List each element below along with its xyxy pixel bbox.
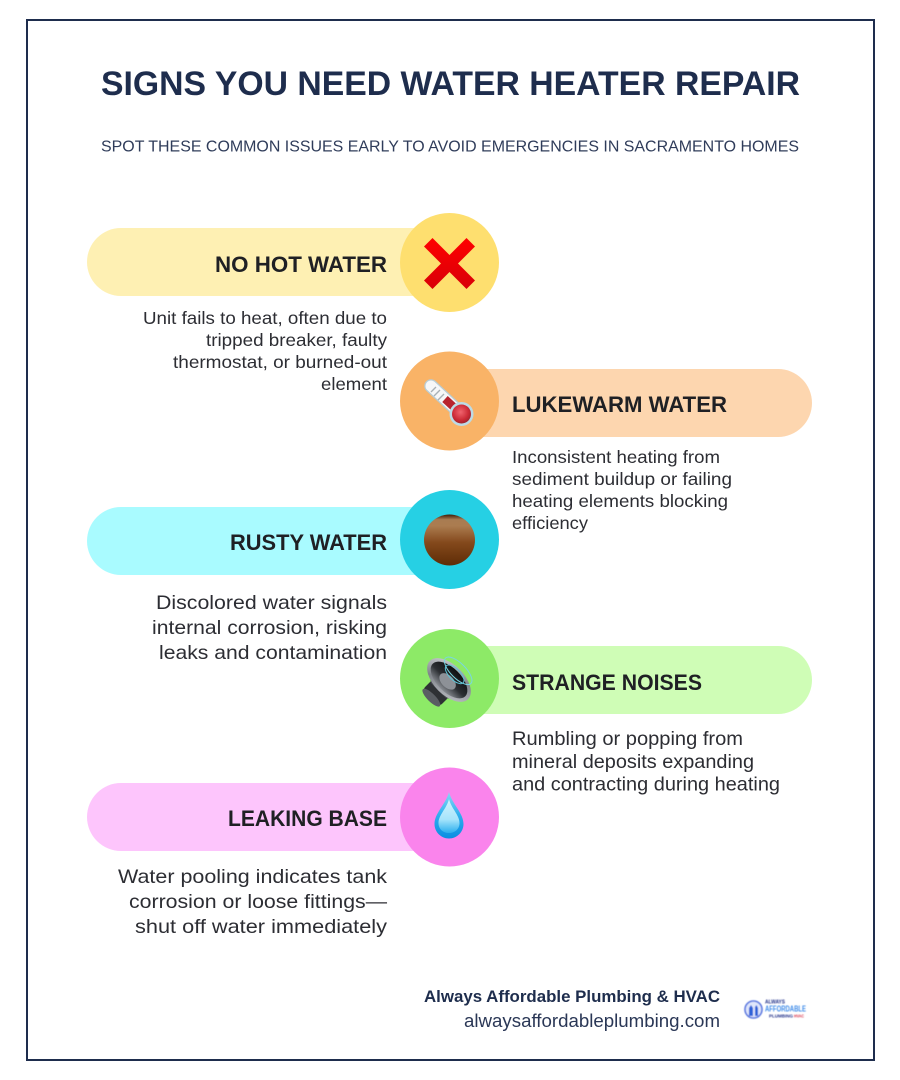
pill: no hot water <box>87 228 457 296</box>
description: lukewarm water: efficiency <box>512 513 588 533</box>
subtitle: SPOT THESE COMMON ISSUES EARLY TO AVOID EMERGENCIES IN SACRAMENTO HOMES <box>101 138 799 156</box>
icon: speaker <box>409 646 483 720</box>
icon: thermometer <box>431 386 474 426</box>
title: SIGNS YOU NEED WATER HEATER REPAIR <box>101 65 800 103</box>
logo <box>745 1000 806 1018</box>
heading: leaking base: LEAKING BASE <box>228 806 387 831</box>
icon circle: leaking base <box>400 768 499 866</box>
panel: lukewarm water <box>400 352 812 533</box>
description: strange noises: Rumbling or popping from <box>512 728 743 750</box>
panel: rusty water <box>87 490 499 664</box>
logo: PLUMBING <box>769 1014 793 1018</box>
description: leaking base <box>118 866 388 938</box>
panel: leaking base <box>87 768 499 938</box>
description: lukewarm water: heating elements blocking <box>512 491 728 511</box>
description: no hot water: tripped breaker, faulty <box>206 330 387 350</box>
description: rusty water <box>152 592 387 664</box>
description: lukewarm water: Inconsistent heating from <box>512 447 720 467</box>
heading: lukewarm water: LUKEWARM WATER <box>512 392 727 417</box>
heading: no hot water: NO HOT WATER <box>215 252 387 277</box>
logo: ALWAYS <box>765 1000 786 1006</box>
icon: water drop <box>434 792 464 838</box>
icon circle: lukewarm water <box>400 352 499 450</box>
description: no hot water: thermostat, or burned-out <box>173 352 387 372</box>
description: strange noises: and contracting during heating <box>512 774 780 796</box>
footer: company name: Always Affordable Plumbing & HVAC <box>424 988 720 1006</box>
icon: brown circle <box>424 514 475 566</box>
description: rusty water: internal corrosion, risking <box>152 617 387 639</box>
heading: rusty water: RUSTY WATER <box>230 530 387 555</box>
icon circle: no hot water <box>400 213 499 312</box>
icon circle: strange noises <box>400 629 499 728</box>
description: lukewarm water: sediment buildup or failing <box>512 469 732 489</box>
description: no hot water: Unit fails to heat, often due to <box>143 308 387 328</box>
icon circle: rusty water <box>400 490 499 589</box>
pill: leaking base <box>87 783 457 851</box>
description: strange noises: mineral deposits expanding <box>512 751 754 773</box>
pill: rusty water <box>87 507 457 575</box>
icon: red cross <box>424 238 475 289</box>
description: no hot water <box>143 308 387 394</box>
description: leaking base: corrosion or loose fittings— <box>129 891 388 913</box>
pill: lukewarm water <box>442 369 812 437</box>
description: leaking base: Water pooling indicates tank <box>118 866 387 888</box>
footer: website: alwaysaffordableplumbing.com <box>464 1011 720 1031</box>
description: rusty water: Discolored water signals <box>156 592 387 614</box>
description: lukewarm water <box>512 447 732 533</box>
description: rusty water: leaks and contamination <box>159 642 387 664</box>
description: strange noises <box>512 728 780 796</box>
panel: strange noises <box>400 629 812 796</box>
panel: no hot water <box>87 213 499 394</box>
logo: AFFORDABLE <box>765 1004 806 1014</box>
heading: strange noises: STRANGE NOISES <box>512 670 702 695</box>
pill: strange noises <box>442 646 812 714</box>
description: no hot water: element <box>321 374 387 394</box>
logo: HVAC <box>794 1014 805 1018</box>
description: leaking base: shut off water immediately <box>135 916 387 938</box>
